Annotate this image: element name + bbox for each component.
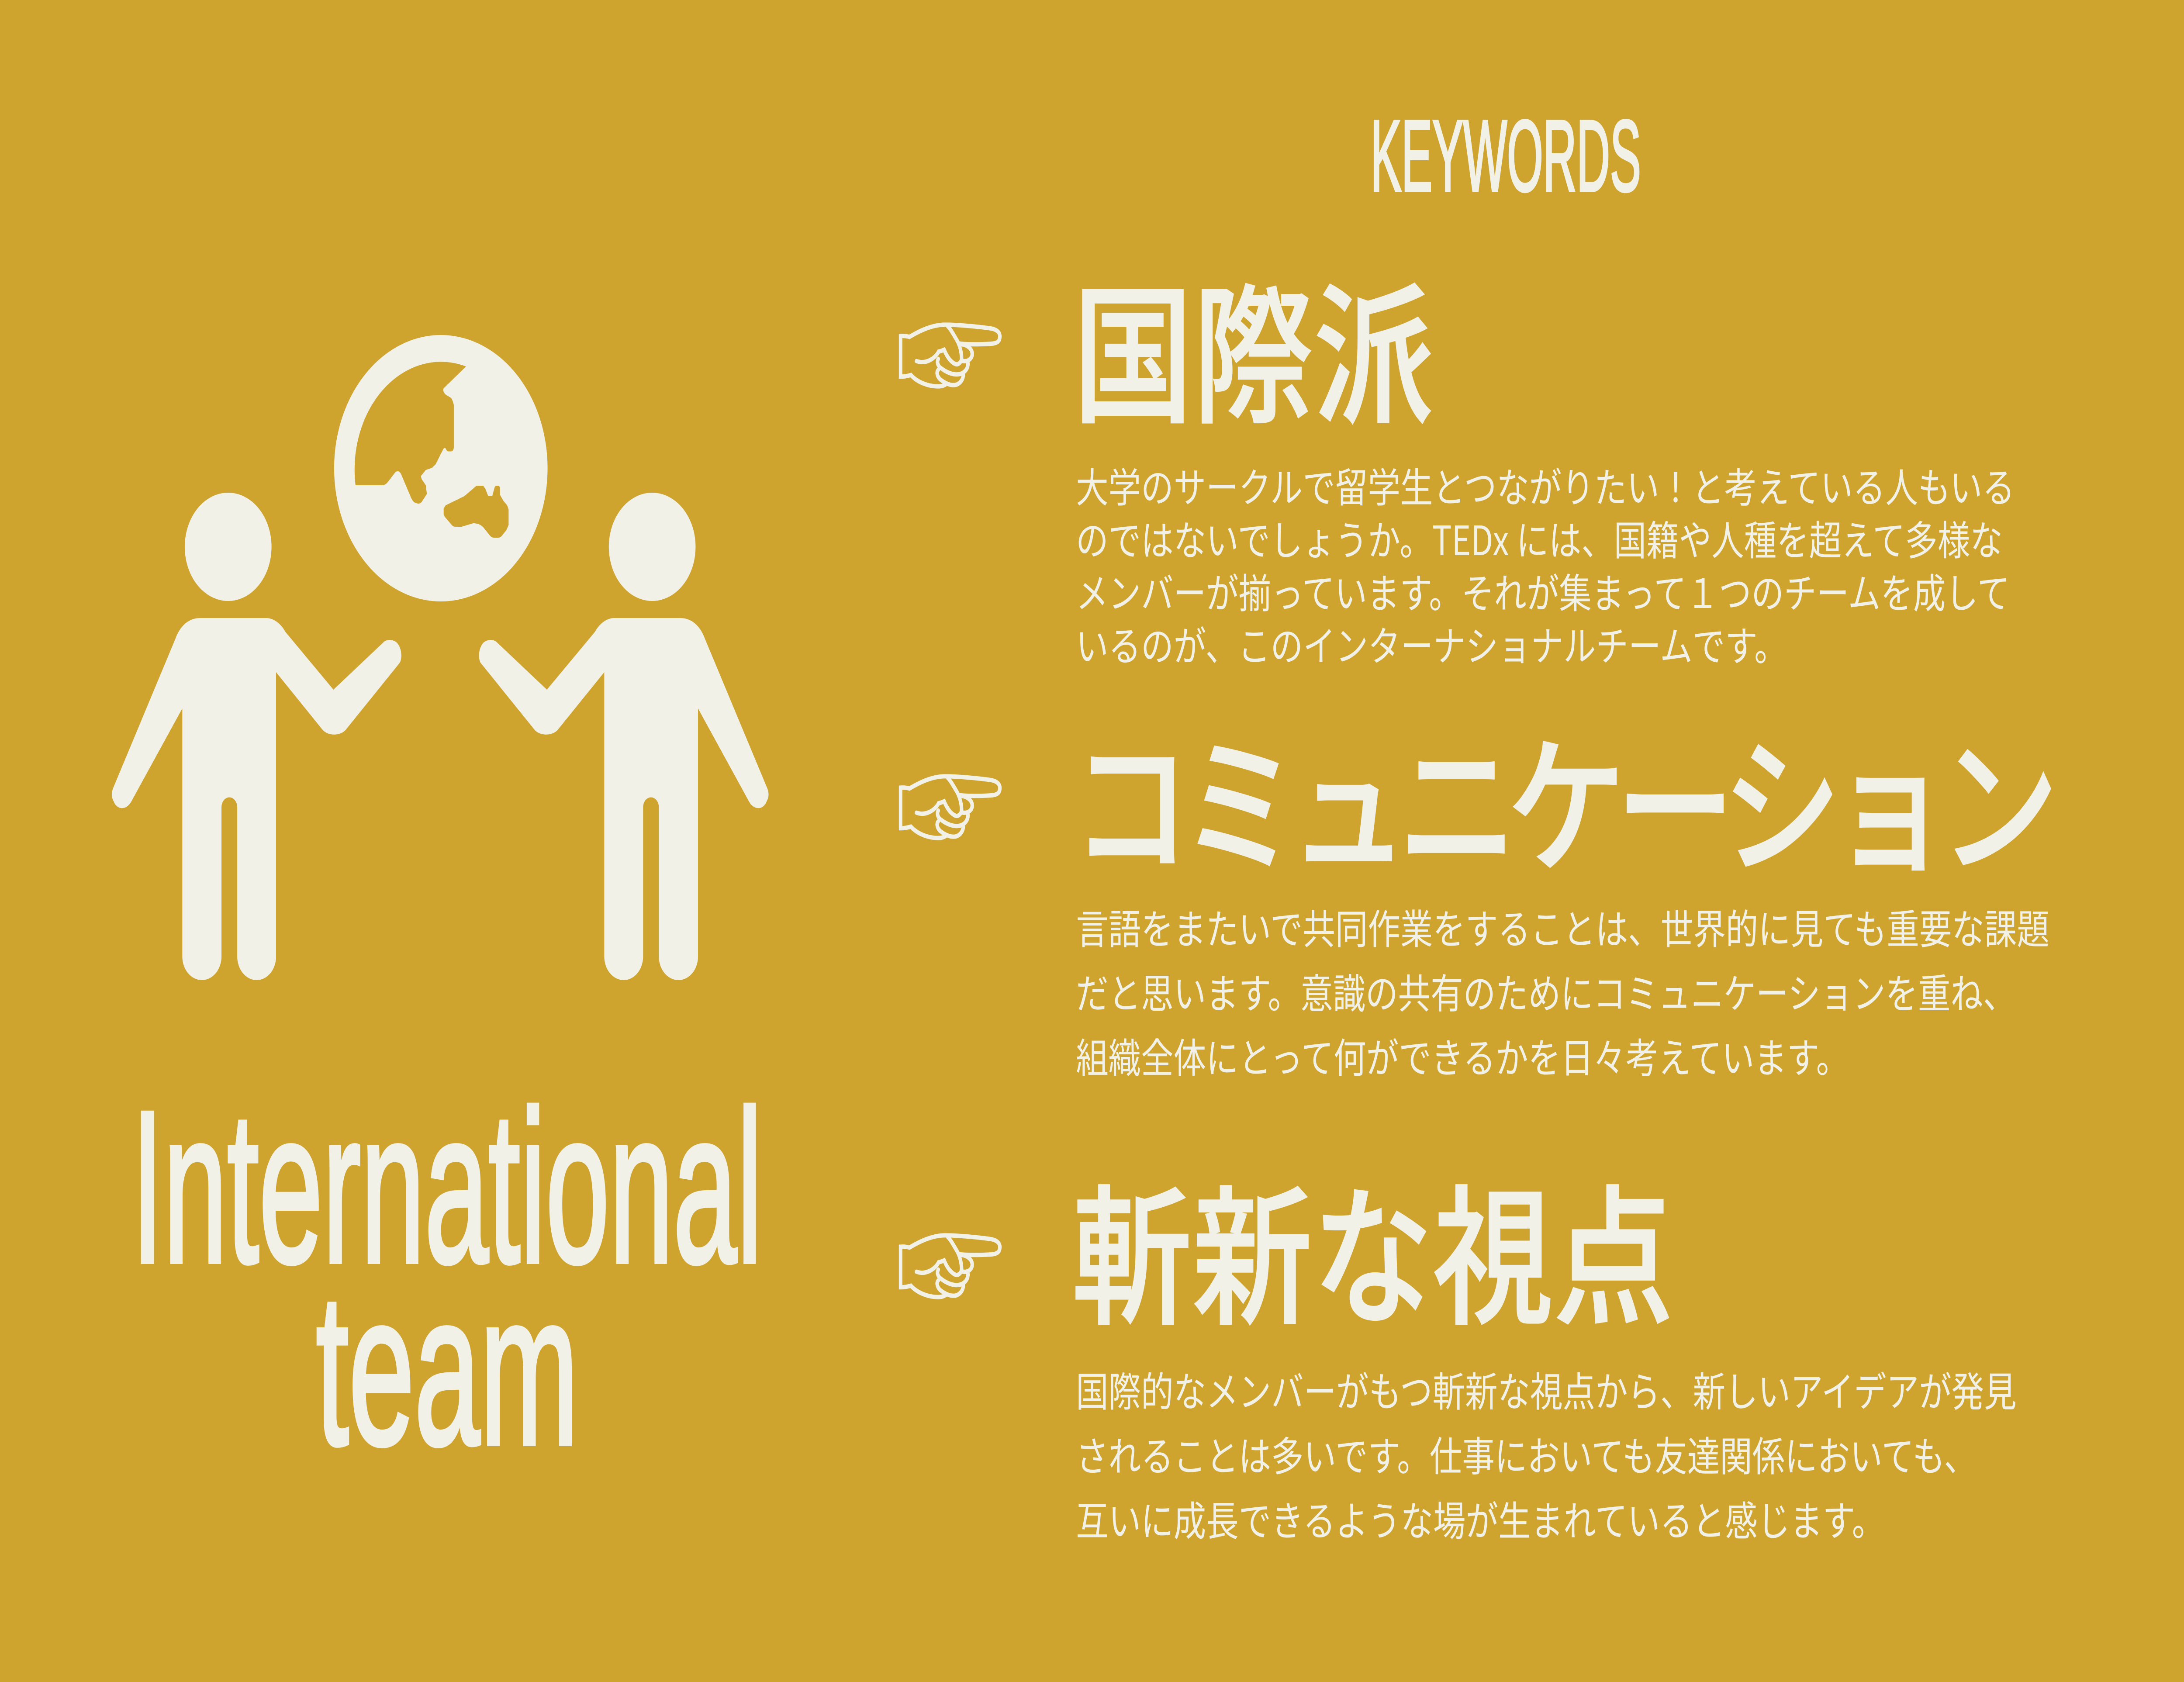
heading: KEYWORDS: KEYWORDS	[1371, 99, 1641, 213]
text block: 斬新な視点 description: されることは多いです。仕事においても友達関係においても、	[1076, 1424, 1977, 1483]
text block: 斬新な視点 description: 互いに成長できるような場が生まれていると感じます。	[1076, 1489, 1884, 1548]
text block: 斬新な視点 description: 国際的なメンバーがもつ斬新な視点から、新しいアイデアが発見	[1076, 1360, 2017, 1419]
icon: pointing hand 1	[901, 325, 1000, 387]
title: International team: team	[316, 1248, 578, 1490]
icon: right person	[479, 493, 768, 980]
icon: pointing hand 3	[901, 1235, 1000, 1297]
illustration: two people and globe	[112, 335, 768, 980]
icon: globe	[334, 335, 548, 601]
text block: 国際派 description	[1076, 456, 2015, 673]
heading: コミュニケーション: コミュニケーション	[1072, 688, 2051, 903]
heading: 国際派: 国際派	[1073, 235, 1434, 453]
text block: 国際派 description: いるのが、このインターナショナルチームです。	[1076, 614, 1787, 673]
text block: コミュニケーション description: 言語をまたいで共同作業をすることは、世界的に見ても重要な課題	[1076, 897, 2049, 956]
text block: コミュニケーション description: だと思います。意識の共有のためにコミュニケーションを重ね、	[1076, 961, 2015, 1020]
text block: コミュニケーション description	[1076, 897, 2049, 1085]
icon: pointing hand 2	[901, 776, 1000, 838]
text block: 国際派 description: メンバーが揃っています。それが集まって１つのチームを成して	[1076, 561, 2010, 620]
text block: 国際派 description: のではないでしょうか。TEDx には、国籍や人種を超えて多様な	[1076, 508, 2003, 567]
text block: コミュニケーション description: 組織全体にとって何ができるかを日々考えています。	[1076, 1026, 1849, 1085]
heading: 斬新な視点: 斬新な視点	[1072, 1137, 1673, 1355]
icon: left person	[112, 493, 401, 980]
title: International team: International	[131, 1066, 762, 1308]
title: International team	[131, 1066, 762, 1490]
text block: 斬新な視点 description	[1076, 1360, 2017, 1548]
text block: 国際派 description: 大学のサークルで留学生とつながりたい！と考えている人もいる	[1076, 456, 2015, 515]
